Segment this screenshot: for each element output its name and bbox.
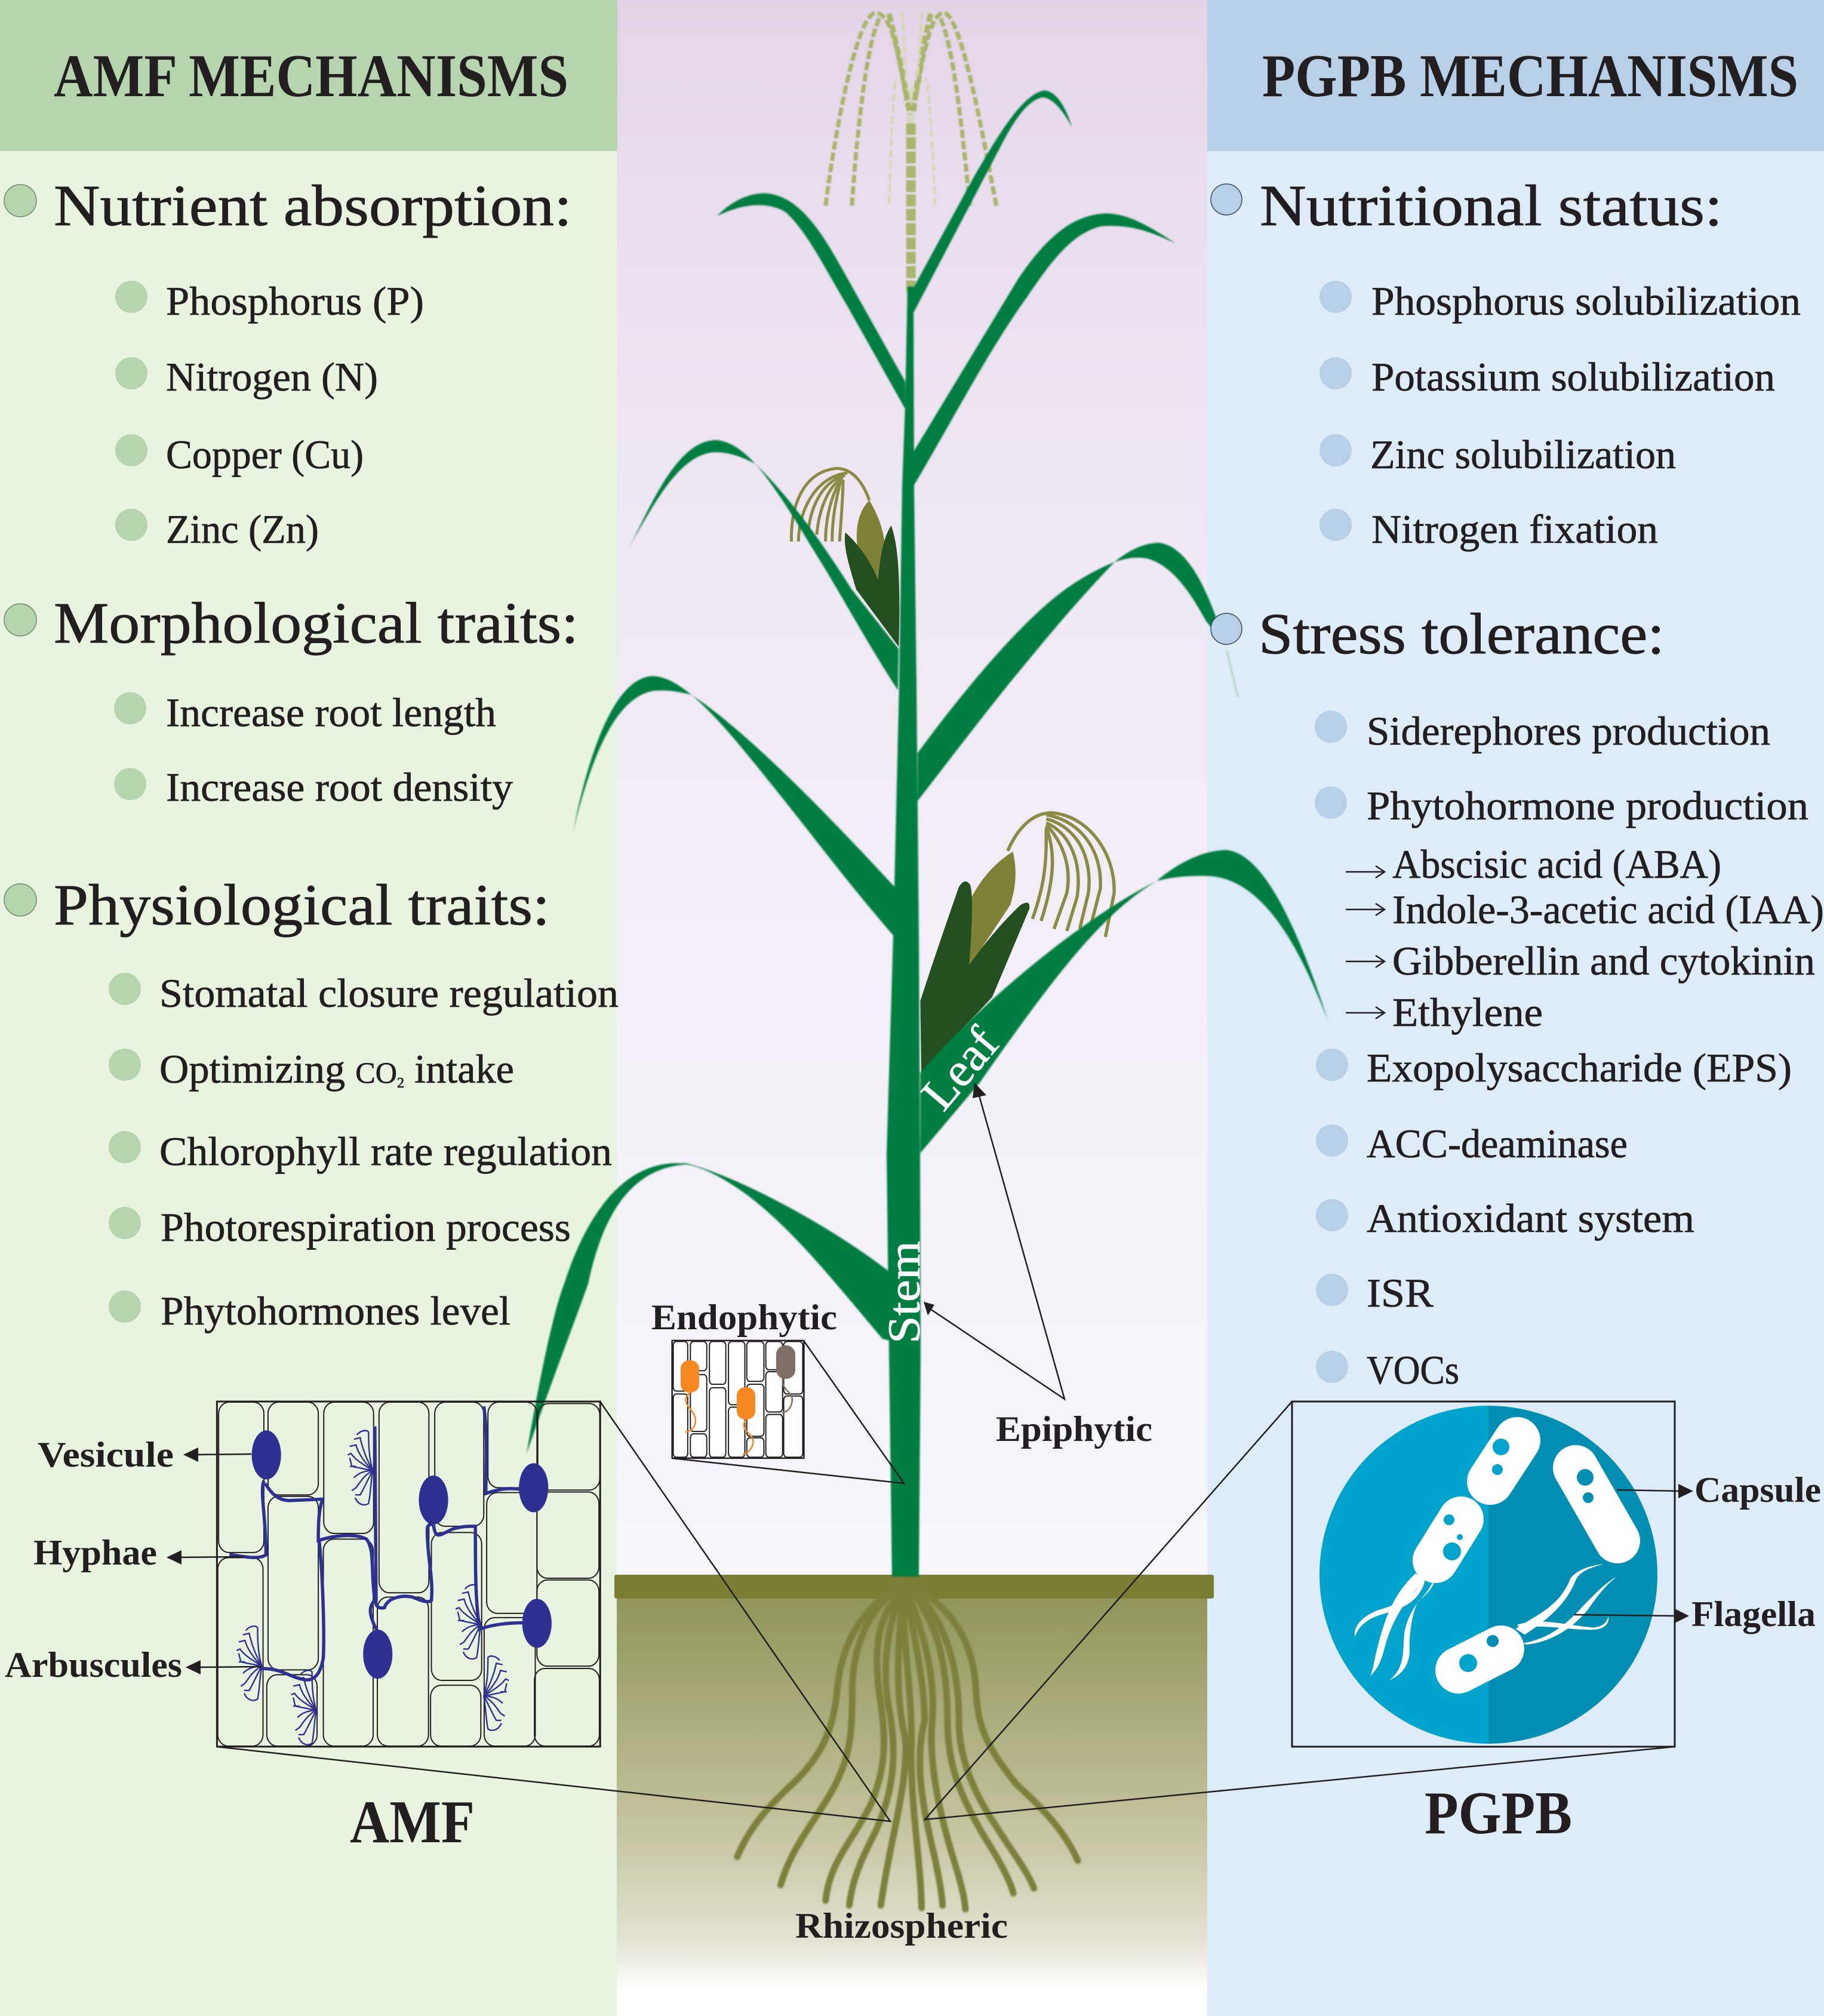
heading: AMF MECHANISMS: AMF MECHANISMS xyxy=(54,42,568,110)
bacterium 1 xyxy=(1490,1439,1517,1482)
sub-item: IAA: Indole-3-acetic acid (IAA) xyxy=(1392,887,1824,932)
panel background: PGPB xyxy=(1207,151,1824,2016)
callout: Hyphae: Hyphae xyxy=(33,1533,157,1572)
label: Endophytic: Endophytic xyxy=(651,1298,837,1337)
PGPB callout lines xyxy=(925,1402,1675,1820)
item: CO2 intake: intake xyxy=(404,1046,514,1092)
sub-item: ethylene: Ethylene xyxy=(1392,989,1543,1035)
item: phytohormone production: Phytohormone production xyxy=(1367,783,1808,828)
bacterium 2, capsule xyxy=(1576,1468,1617,1541)
item: siderophores: Siderephores production xyxy=(1367,708,1770,754)
endophytic cell diagram xyxy=(672,1341,804,1458)
header band: AMF xyxy=(0,0,617,151)
panel: PGPB mechanisms xyxy=(1211,42,1824,1393)
callout: Epiphytic arrows xyxy=(924,1083,1065,1399)
panel background: AMF xyxy=(0,151,617,2016)
stem and leaves xyxy=(527,91,1328,1576)
item: Phosphorus: Phosphorus (P) xyxy=(166,278,424,324)
endophytic callout lines xyxy=(672,1341,904,1483)
leaf: lower left xyxy=(573,676,894,937)
item: phosphorus solubilization: Phosphorus solubilization xyxy=(1371,278,1801,324)
item: stomatal closure: Stomatal closure regulation xyxy=(159,970,619,1016)
callout: Capsule xyxy=(1617,1470,1821,1510)
header band: PGPB xyxy=(1207,0,1824,151)
section: Morphological traits: Morphological traits: xyxy=(54,591,579,656)
item: ISR xyxy=(1316,1270,1434,1316)
item: ACC-deaminase: ACC-deaminase xyxy=(1367,1121,1628,1166)
label: AMF: AMF xyxy=(350,1788,475,1856)
PGPB bacteria diagram xyxy=(1292,1402,1675,1747)
AMF root cell diagram xyxy=(217,1402,600,1747)
callout: Flagella: Flagella xyxy=(1691,1594,1816,1634)
inset frame xyxy=(1292,1402,1675,1747)
leaf: upper right xyxy=(913,213,1176,487)
callout: Hyphae xyxy=(33,1533,245,1572)
sub-item: gibberellin: Gibberellin and cytokinin xyxy=(1392,938,1815,984)
sub-item: ABA: Abscisic acid (ABA) xyxy=(1392,841,1721,887)
bacterium 4 with flagella xyxy=(1459,1564,1616,1672)
label: PGPB: PGPB xyxy=(1425,1780,1572,1847)
section: Stress tolerance: Stress tolerance: xyxy=(1259,602,1665,666)
item: root length: Increase root length xyxy=(166,690,496,735)
leaf label: Leaf xyxy=(911,1018,1009,1120)
item: CO2 intake xyxy=(109,1046,514,1092)
leaf: top right xyxy=(911,91,1072,318)
callout: Arbuscules xyxy=(5,1645,262,1685)
label: Rhizospheric: Rhizospheric xyxy=(795,1906,1008,1946)
item: potassium solubilization: Potassium solubilization xyxy=(1371,354,1775,399)
endophytic bacterium, orange xyxy=(681,1360,699,1432)
label: Epiphytic: Epiphytic xyxy=(996,1409,1152,1449)
stem label: Stem xyxy=(879,1241,930,1344)
bacterium 3 with flagella xyxy=(1355,1514,1463,1680)
section: Nutrient absorption: Nutrient absorption: xyxy=(54,174,572,238)
leaf: middle right faded tip xyxy=(1227,651,1238,697)
blue disc xyxy=(1319,1406,1657,1744)
leaf: top left xyxy=(717,193,905,409)
item: CO2 intake: Optimizing CO xyxy=(159,1046,397,1092)
callout: Vesicule xyxy=(38,1435,251,1474)
item: zinc solubilization: Zinc solubilization xyxy=(1370,432,1676,477)
endophytic bacterium, orange xyxy=(737,1387,755,1455)
section: Nutritional status: Nutritional status: xyxy=(1260,174,1723,238)
callout: Arbuscules: Arbuscules xyxy=(5,1645,182,1685)
AMF callout lines xyxy=(217,1402,890,1821)
leaf: middle left xyxy=(629,440,899,690)
section: Physiological traits: Physiological traits: xyxy=(54,873,550,938)
callout: Vesicule: Vesicule xyxy=(38,1435,174,1474)
item: VOCs: VOCs xyxy=(1367,1347,1459,1393)
panel: AMF mechanisms xyxy=(4,42,619,1333)
item: VOCs xyxy=(1316,1347,1459,1393)
soil xyxy=(614,1575,1214,1992)
stem xyxy=(887,287,921,1576)
item: root density: Increase root density xyxy=(166,764,513,810)
item: ISR: ISR xyxy=(1367,1270,1434,1316)
maize tassel xyxy=(826,11,996,293)
vesicles xyxy=(252,1430,552,1679)
leaf: lower right carrying the Leaf label xyxy=(920,850,1328,1153)
upper ear of maize xyxy=(791,468,899,647)
arbuscules xyxy=(236,1431,509,1745)
leaf: bottom left xyxy=(527,1163,890,1453)
endophytic bacterium, brown xyxy=(776,1345,795,1413)
item: nitrogen fixation: Nitrogen fixation xyxy=(1371,506,1658,552)
item: photorespiration: Photorespiration process xyxy=(161,1204,571,1250)
roots xyxy=(737,1585,1078,1909)
hyphae xyxy=(229,1406,524,1680)
item: EPS: Exopolysaccharide (EPS) xyxy=(1367,1045,1792,1090)
item: Zinc: Zinc (Zn) xyxy=(166,506,319,552)
item: phytohormones: Phytohormones level xyxy=(161,1288,510,1333)
center background: sky gradient xyxy=(617,0,1207,1576)
item: chlorophyll: Chlorophyll rate regulation xyxy=(159,1129,612,1174)
item: antioxidant system: Antioxidant system xyxy=(1367,1196,1694,1241)
leaf: middle right xyxy=(918,543,1225,801)
AMF cell walls xyxy=(217,1402,600,1747)
item: CO2 intake: 2 xyxy=(397,1075,404,1091)
callout: Capsule: Capsule xyxy=(1694,1470,1821,1510)
item: Nitrogen: Nitrogen (N) xyxy=(166,354,378,399)
lower ear of maize xyxy=(920,813,1114,1073)
item: Copper: Copper (Cu) xyxy=(166,432,364,477)
callout: Flagella xyxy=(1574,1594,1816,1634)
